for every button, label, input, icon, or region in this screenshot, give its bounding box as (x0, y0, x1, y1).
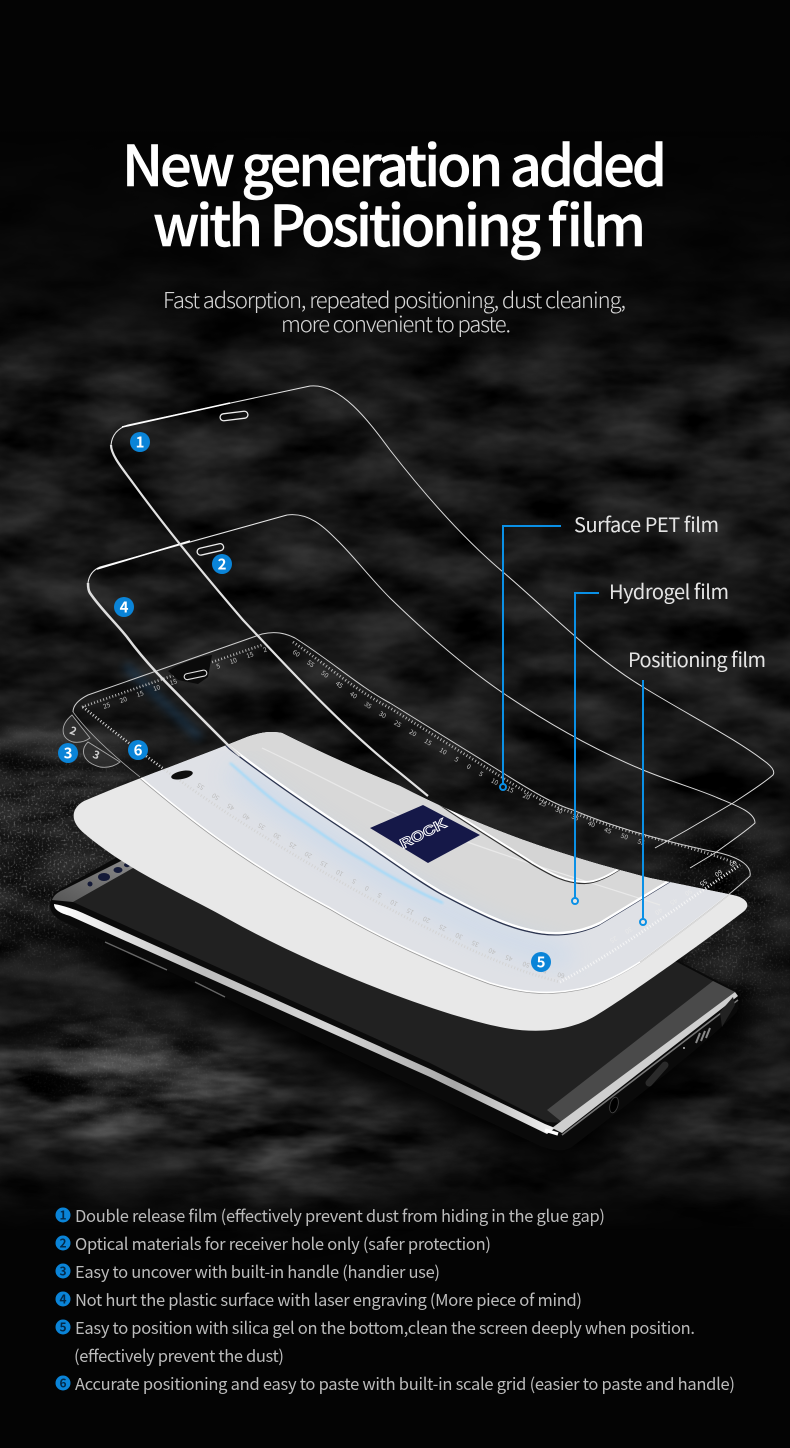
marker 3 (58, 742, 78, 764)
item 2: Optical materials for receiver hole only (safer protection) (75, 1231, 491, 1255)
item 4: 4 (59, 1290, 67, 1308)
label: Surface PET film (574, 509, 719, 538)
marker 4: 4 (120, 596, 129, 618)
receiver slot (220, 411, 248, 421)
brand text: ROCK (397, 815, 449, 852)
bright top-left edge (97, 541, 190, 569)
numbered markers (58, 432, 551, 972)
label: Hydrogel film (609, 576, 729, 605)
callout: positioning film (628, 644, 766, 925)
thick left edge on dark (111, 445, 428, 796)
title (122, 122, 667, 263)
marker 1 (130, 432, 150, 452)
top camera band (52, 860, 140, 902)
marker 4 (114, 596, 134, 618)
hydrogel film (88, 515, 755, 868)
item 3: 3 (59, 1262, 67, 1280)
ruler numbers: 25 20 15 10 15 10 5 5 10 15 20 (102, 647, 268, 709)
positioning film (62, 632, 751, 984)
ruler numbers: 60 55 50 45 40 35 30 25 20 15 10 5 0 5 10 15 20 25 30 35 40 45 50 55 (292, 650, 645, 845)
ruler numbers (102, 647, 645, 845)
phone shadow (40, 925, 770, 1175)
tab digits (68, 722, 102, 763)
marker 2: 2 (218, 554, 227, 574)
ruler ticks top (82, 645, 262, 707)
marker 5 (531, 952, 551, 972)
thick left edge on dark (88, 583, 240, 756)
cameras (88, 863, 130, 886)
subtitle (163, 283, 626, 339)
positioning film: 60 55 50 45 40 35 30 25 20 15 10 5 0 5 10 15 20 25 30 35 40 45 50 55 (196, 783, 564, 978)
marker 1: 1 (136, 432, 144, 452)
glow behind film (125, 665, 200, 738)
surface PET film (111, 386, 774, 848)
silver bottom frame (54, 904, 555, 1134)
tab digits: 2 (68, 722, 79, 739)
item 1: 1 (59, 1206, 67, 1224)
film outline (73, 633, 750, 962)
tab digits: 3 (91, 746, 102, 763)
marker 2 (212, 554, 232, 574)
item 3: Easy to uncover with built-in handle (handier use) (75, 1259, 440, 1283)
white backing sheet (74, 732, 748, 1031)
item 1: Double release film (effectively prevent dust from hiding in the glue gap) (75, 1203, 605, 1227)
blue glow (232, 770, 570, 958)
pull tabs (63, 715, 120, 767)
hydrogel edge shadow (225, 745, 670, 936)
receiver slot (168, 655, 212, 684)
phone (40, 850, 770, 1175)
feature list (56, 1203, 735, 1395)
top edge (88, 515, 287, 583)
sheet slot (170, 769, 194, 781)
film layers seen through sheet (140, 732, 730, 994)
ruler ticks right (293, 642, 735, 863)
surface film edge shadow (438, 804, 620, 884)
item 5 (56, 1315, 695, 1367)
title: with Positioning film (153, 182, 646, 263)
screen end band (547, 981, 735, 1123)
label: Positioning film (628, 644, 766, 673)
positioning film edge (140, 778, 730, 994)
ruler ticks bottom (560, 865, 740, 982)
item 4: Not hurt the plastic surface with laser engraving (More piece of mind) (75, 1287, 582, 1311)
ports (608, 997, 735, 1114)
faint inner crease (262, 748, 660, 905)
positioning film: 65 60 55 50 45 40 35 30 25 (610, 860, 736, 943)
dark stone background (0, 210, 790, 1229)
marker 5: 5 (537, 952, 546, 972)
silver right frame (552, 992, 738, 1133)
bright top-left edge (122, 403, 230, 427)
item 5: 5 (59, 1318, 67, 1336)
item 2: 2 (59, 1234, 67, 1252)
marker 6 (128, 740, 148, 760)
subtitle: Fast adsorption, repeated positioning, dust cleaning, (163, 283, 626, 315)
receiver slot (196, 543, 224, 556)
item 5: Easy to position with silica gel on the bottom,clean the screen deeply when position. (75, 1315, 695, 1339)
callout: hydrogel film (572, 576, 729, 904)
marker 6: 6 (134, 740, 143, 760)
ruler ticks left (83, 707, 560, 982)
screen (73, 866, 735, 1123)
item 6: 6 (59, 1374, 67, 1392)
marker 3: 3 (64, 742, 72, 764)
subtitle: more convenient to paste. (281, 307, 511, 339)
item 5: (effectively prevent the dust) (74, 1343, 284, 1367)
top edge (111, 386, 310, 445)
callout: surface PET film (500, 509, 719, 790)
item 6: Accurate positioning and easy to paste with built-in scale grid (easier to paste and handle) (75, 1371, 735, 1395)
phone body (50, 850, 738, 1150)
corner highlight (545, 1130, 558, 1134)
brand label (370, 805, 480, 863)
side buttons (105, 942, 225, 997)
title: New generation added (122, 122, 667, 203)
